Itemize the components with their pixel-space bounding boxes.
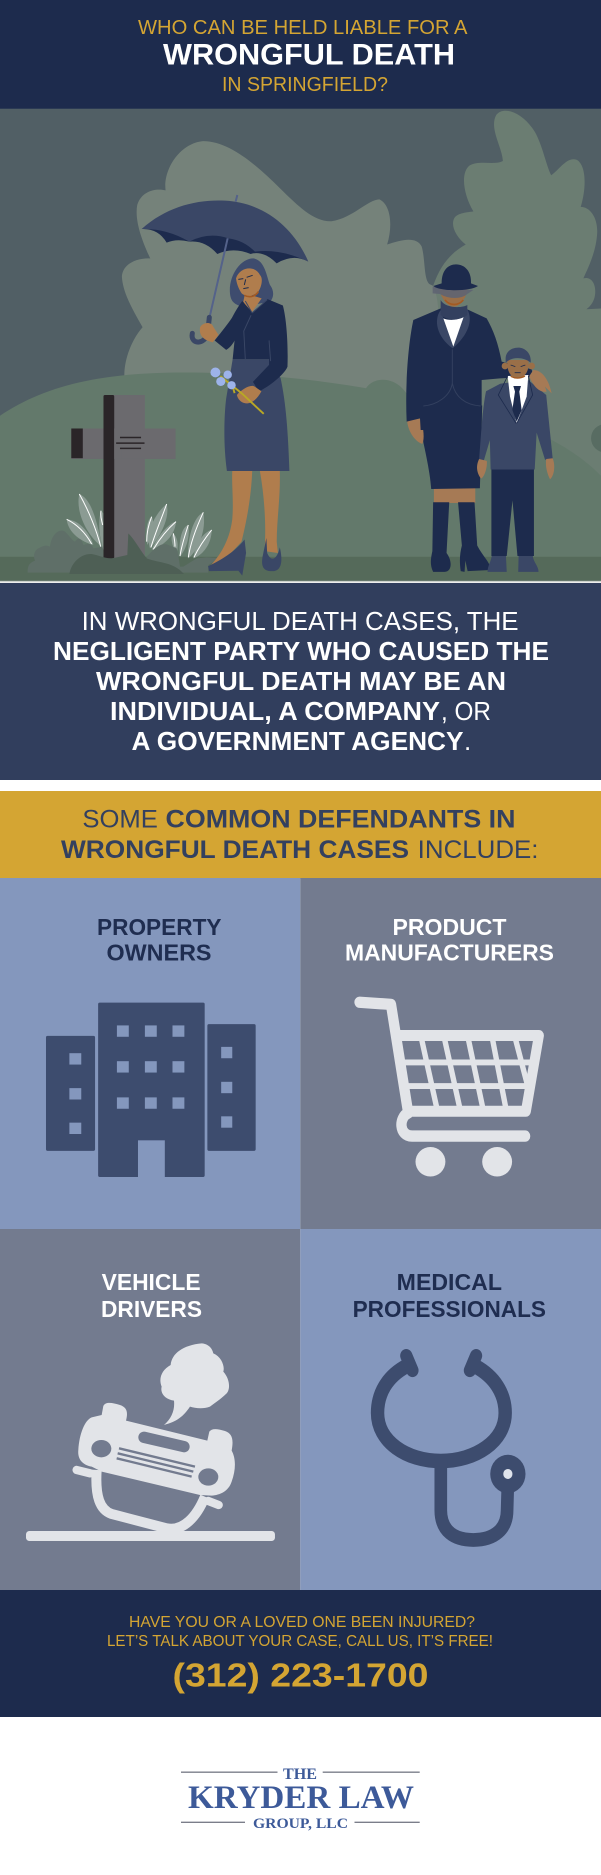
flowers	[210, 368, 264, 414]
face	[507, 360, 529, 378]
phone number: (312) 223-1700	[172, 1658, 428, 1695]
heading: wrongful death: WRONGFUL DEATH	[163, 39, 455, 72]
heading line 2: WRONGFUL DEATH CASES	[61, 836, 409, 864]
shoes	[488, 556, 507, 572]
lower jacket	[479, 380, 553, 469]
text line 5: A GOVERNMENT AGENCY	[132, 726, 464, 756]
hair	[230, 258, 273, 307]
boots	[431, 502, 451, 572]
text line 2: NEGLIGENT PARTY WHO CAUSED THE	[53, 636, 549, 666]
label: medical professionals: PROFESSIONALS	[353, 1296, 546, 1322]
white shirt	[443, 316, 464, 347]
hat	[433, 264, 478, 290]
road	[26, 1531, 275, 1541]
logo: the kryder law group: KRYDER LAW	[188, 1780, 414, 1816]
legs	[210, 471, 252, 566]
label: vehicle drivers	[101, 1269, 202, 1322]
lapels	[437, 309, 470, 348]
skirt	[224, 359, 289, 471]
background bush: left	[122, 141, 439, 414]
grille	[117, 1448, 195, 1477]
panel: medical professionals	[300, 1229, 601, 1590]
icon: office buildings	[46, 1003, 256, 1177]
heading line 1: COMMON DEFENDANTS IN	[166, 806, 516, 834]
label: vehicle drivers: DRIVERS	[101, 1296, 202, 1322]
scarf	[441, 300, 467, 319]
shoes	[208, 539, 246, 576]
label: product manufacturers	[345, 914, 554, 966]
boy in suit	[477, 348, 554, 572]
label: medical professionals: MEDICAL	[397, 1269, 502, 1295]
logo: the kryder law group: THE	[283, 1766, 317, 1783]
smoke	[160, 1343, 229, 1425]
icon: overturned car with smoke	[26, 1343, 275, 1541]
text line 3: WRONGFUL DEATH MAY BE AN	[96, 666, 506, 696]
roof	[96, 1470, 205, 1529]
text line 4: INDIVIDUAL, A COMPANY	[110, 696, 440, 726]
panel: call to action	[0, 1590, 601, 1717]
jacket lapels	[498, 376, 533, 423]
cta line 2: LET’S TALK ABOUT YOUR CASE, CALL US, IT’S FREE!	[107, 1633, 493, 1650]
label: product manufacturers: PRODUCT	[392, 914, 506, 940]
background bush: right	[433, 111, 601, 489]
skirt	[420, 406, 482, 489]
umbrella canopy	[142, 201, 308, 262]
neck and face	[243, 293, 262, 314]
collar shirt	[508, 375, 528, 423]
bumpers	[77, 1470, 219, 1505]
illustration: funeral scene	[0, 109, 601, 582]
tie	[512, 386, 522, 422]
headlights	[91, 1440, 111, 1457]
mourner in hat	[406, 264, 533, 572]
hair	[506, 348, 531, 363]
hand on leg	[407, 418, 424, 444]
panel: vehicle drivers	[0, 1229, 300, 1590]
icon: stethoscope	[378, 1356, 526, 1540]
upper body	[406, 264, 533, 430]
label: product manufacturers: MANUFACTURERS	[345, 940, 554, 966]
cta line 1: HAVE YOU OR A LOVED ONE BEEN INJURED?	[129, 1614, 475, 1631]
heading: in springfield: IN SPRINGFIELD?	[222, 74, 388, 96]
panel: negligent party statement	[0, 583, 601, 780]
jacket and arm	[406, 308, 533, 430]
face	[439, 288, 467, 307]
legs	[434, 487, 475, 503]
woman with umbrella	[142, 195, 308, 576]
ground	[0, 557, 601, 581]
label: property owners: OWNERS	[106, 940, 212, 966]
text line 4: , OR	[441, 696, 491, 726]
heading: who can be held liable: WHO CAN BE HELD LIABLE FOR A	[138, 17, 468, 39]
heading line 2	[61, 836, 538, 864]
text line 5: .	[464, 726, 471, 756]
logo: the kryder law group	[181, 1766, 420, 1832]
foreground mound	[69, 533, 184, 574]
ears	[502, 363, 508, 369]
label: medical professionals	[353, 1269, 546, 1322]
heading line 1: SOME	[82, 806, 158, 834]
windshield slot	[144, 1437, 184, 1447]
veil	[433, 287, 473, 298]
head and umbrella	[142, 195, 308, 342]
car body	[78, 1403, 235, 1496]
label: property owners: PROPERTY	[97, 914, 222, 940]
label: vehicle drivers: VEHICLE	[102, 1269, 201, 1295]
panel: product manufacturers	[300, 878, 601, 1229]
icon: shopping cart	[360, 1002, 539, 1177]
hill	[0, 372, 601, 561]
adult hand on shoulder	[529, 370, 552, 393]
plants around the cross	[28, 494, 220, 573]
panel: common defendants heading	[0, 791, 601, 878]
hands	[477, 459, 487, 479]
umbrella shaft and handle	[209, 195, 237, 318]
jacket seams	[423, 349, 481, 406]
label: property owners	[97, 914, 222, 966]
blouse	[215, 299, 288, 391]
gravestone cross	[71, 395, 176, 559]
logo: the kryder law group: GROUP, LLC	[253, 1816, 348, 1832]
panel: title header	[0, 0, 601, 109]
hands	[200, 323, 218, 342]
pants	[491, 468, 534, 556]
hill detail at right edge	[591, 424, 601, 453]
umbrella underside	[142, 223, 308, 263]
heading line 2: INCLUDE:	[418, 836, 538, 864]
text line 1: IN WRONGFUL DEATH CASES, THE	[82, 606, 519, 636]
panel: property owners	[0, 878, 300, 1229]
